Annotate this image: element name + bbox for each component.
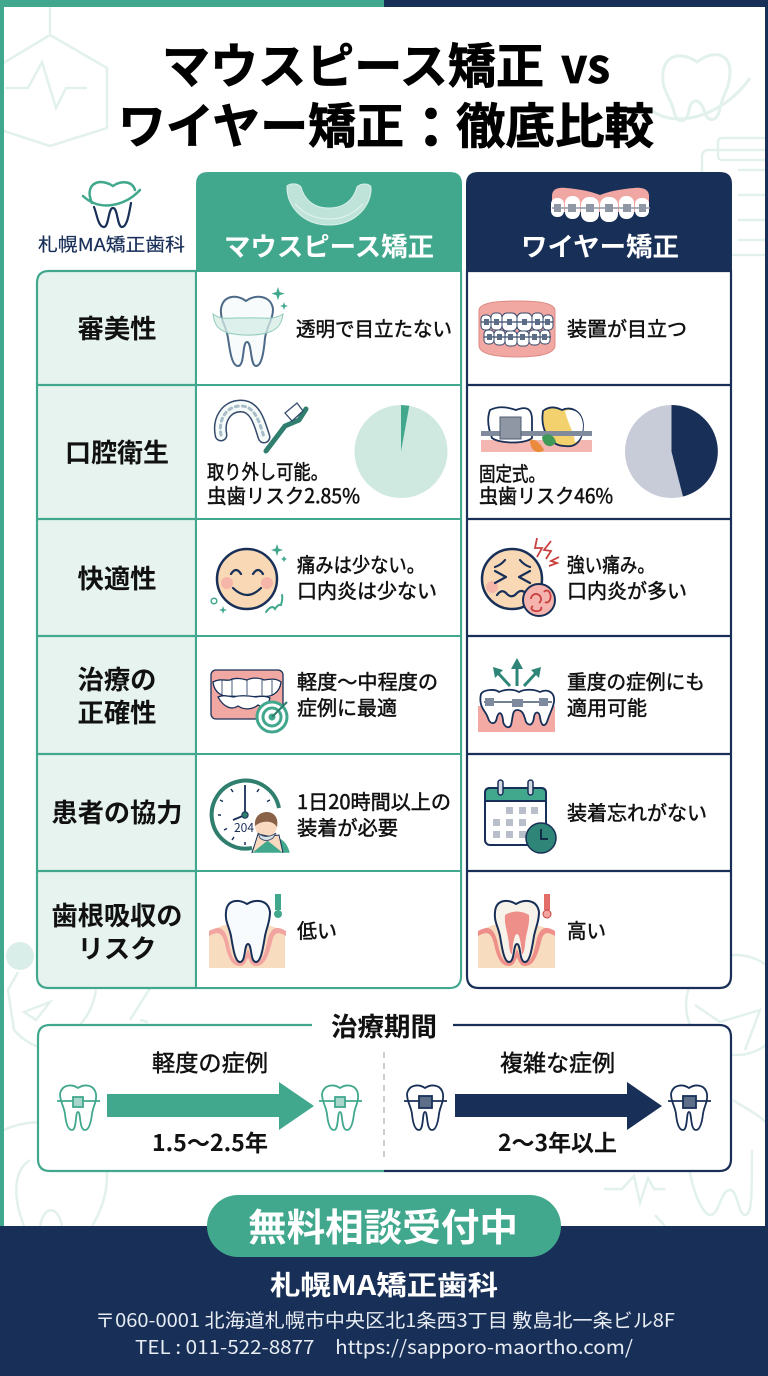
icon: end tooth green (319, 1086, 362, 1130)
text: 装置が目立つ (567, 313, 687, 342)
row 2 left: hygiene (207, 403, 448, 509)
text: 症例に最適 (297, 692, 397, 721)
text: 痛みは少ない。 (297, 549, 425, 578)
text: 適用可能 (567, 692, 647, 721)
cta pill (207, 1195, 561, 1257)
icon: smiling face (211, 544, 287, 614)
arrow: green (107, 1082, 314, 1130)
header: mouthpiece (196, 172, 462, 270)
label: 快適性: 快適性 (78, 559, 156, 596)
label: 治療の正確性: 治療の (78, 660, 156, 697)
label: 口腔衛生: 口腔衛生 (65, 433, 169, 470)
text: 虫歯リスク2.85% (207, 480, 360, 509)
panel: wire column (466, 172, 732, 988)
row 4 left: accuracy (211, 666, 438, 732)
row 1 right: aesthetics (479, 301, 687, 357)
icon: toothbrush (266, 403, 306, 451)
text: 取り外し可能。 (207, 456, 328, 485)
icon: teeth and arrows (478, 658, 555, 732)
arrow: navy (455, 1082, 662, 1130)
row 6 right: root resorption (478, 894, 606, 968)
icon: logo tooth (83, 182, 140, 227)
title: 徹底比較 (456, 87, 654, 157)
label: 歯根吸収のリスク: リスク (78, 929, 156, 966)
footer band (0, 1226, 768, 1376)
title (118, 27, 654, 165)
label: 患者の協力: 患者の協力 (52, 793, 182, 830)
icon: decay and braces (481, 407, 592, 452)
panel: treatment period (38, 1007, 731, 1171)
duration: mild: 1.5〜2.5年 (152, 1124, 268, 1158)
label: 歯根吸収のリスク (52, 896, 182, 966)
row 1 left: aesthetics (213, 287, 452, 366)
row labels (52, 309, 182, 966)
label: 歯根吸収のリスク: 歯根吸収の (52, 896, 182, 933)
text: 装着が必要 (297, 812, 398, 841)
text: 口内炎は少ない (297, 575, 437, 604)
icon: start tooth navy (404, 1086, 447, 1130)
row 2 right: hygiene (479, 405, 718, 509)
icon: healthy tooth (209, 894, 286, 968)
logo text: 札幌MA矯正歯科 (38, 231, 185, 257)
text: 重度の症例にも (567, 666, 705, 695)
row 4 right: accuracy (478, 658, 705, 732)
icon: clear aligner (287, 184, 371, 225)
row 3 left: comfort (211, 544, 437, 614)
pie chart: 46% (625, 405, 718, 498)
title: ワイヤー矯正 (118, 87, 404, 157)
table frame (37, 271, 461, 988)
label: 治療の正確性 (78, 660, 156, 730)
text: 軽度〜中程度の (297, 666, 438, 695)
title: vs (561, 27, 610, 97)
row 3 right: comfort (482, 538, 687, 616)
icon: removable tray (220, 406, 264, 437)
text: 1日20時間以上の (297, 786, 451, 815)
text: 低い (297, 915, 337, 944)
text: 高い (567, 915, 606, 944)
pie chart: 2.85% (354, 405, 448, 498)
icon: braces teeth (551, 188, 650, 222)
header text: ワイヤー矯正 (521, 227, 679, 264)
text: 固定式。 (479, 458, 545, 487)
case: mild heading: 軽度の症例 (152, 1044, 268, 1078)
title: ： (402, 83, 460, 165)
clinic logo (38, 182, 185, 257)
icon: clock with patient (212, 781, 290, 853)
panel: mouthpiece column (37, 172, 462, 988)
text: 口内炎が多い (567, 575, 687, 604)
address: 〒060-0001 北海道札幌市中央区北1条西3丁目 敷島北一条ビル8F (95, 1306, 675, 1333)
icon: start tooth green (57, 1086, 100, 1130)
icon: end tooth navy (668, 1086, 711, 1130)
icon: teeth with target (211, 670, 287, 732)
row 5 right: cooperation (485, 780, 707, 853)
text: 装着忘れがない (567, 797, 707, 826)
case: complex heading: 複雑な症例 (500, 1044, 615, 1078)
row 5 left: cooperation (212, 781, 451, 853)
title: マウスピース矯正 (162, 27, 544, 97)
duration: complex: 2〜3年以上 (498, 1124, 617, 1158)
icon: pained face (482, 538, 559, 616)
icon: calendar with clock (485, 780, 556, 853)
text: 透明で目立たない (296, 313, 452, 342)
left column (37, 271, 196, 988)
label: 治療の正確性: 正確性 (78, 693, 156, 730)
clinic name: 札幌MA矯正歯科 (270, 1264, 498, 1303)
text: 強い痛み。 (567, 549, 655, 578)
table frame (467, 271, 731, 988)
header: wire (466, 172, 732, 270)
contact: TEL : 011-522-8877 https://sapporo-maortho.com/ (135, 1333, 634, 1360)
header text: マウスピース矯正 (224, 227, 434, 264)
heading: 治療期間 (331, 1007, 437, 1044)
icon: clock with patient: 204 (234, 819, 254, 836)
label: 審美性: 審美性 (78, 309, 156, 346)
text: 虫歯リスク46% (479, 480, 613, 509)
row 6 left: root resorption (209, 894, 337, 968)
icon: tooth with aligner (213, 287, 288, 366)
icon: damaged tooth (478, 894, 555, 968)
icon: braces with gums (479, 301, 555, 357)
top bar (0, 0, 768, 7)
cta pill: 無料相談受付中 (248, 1197, 518, 1252)
